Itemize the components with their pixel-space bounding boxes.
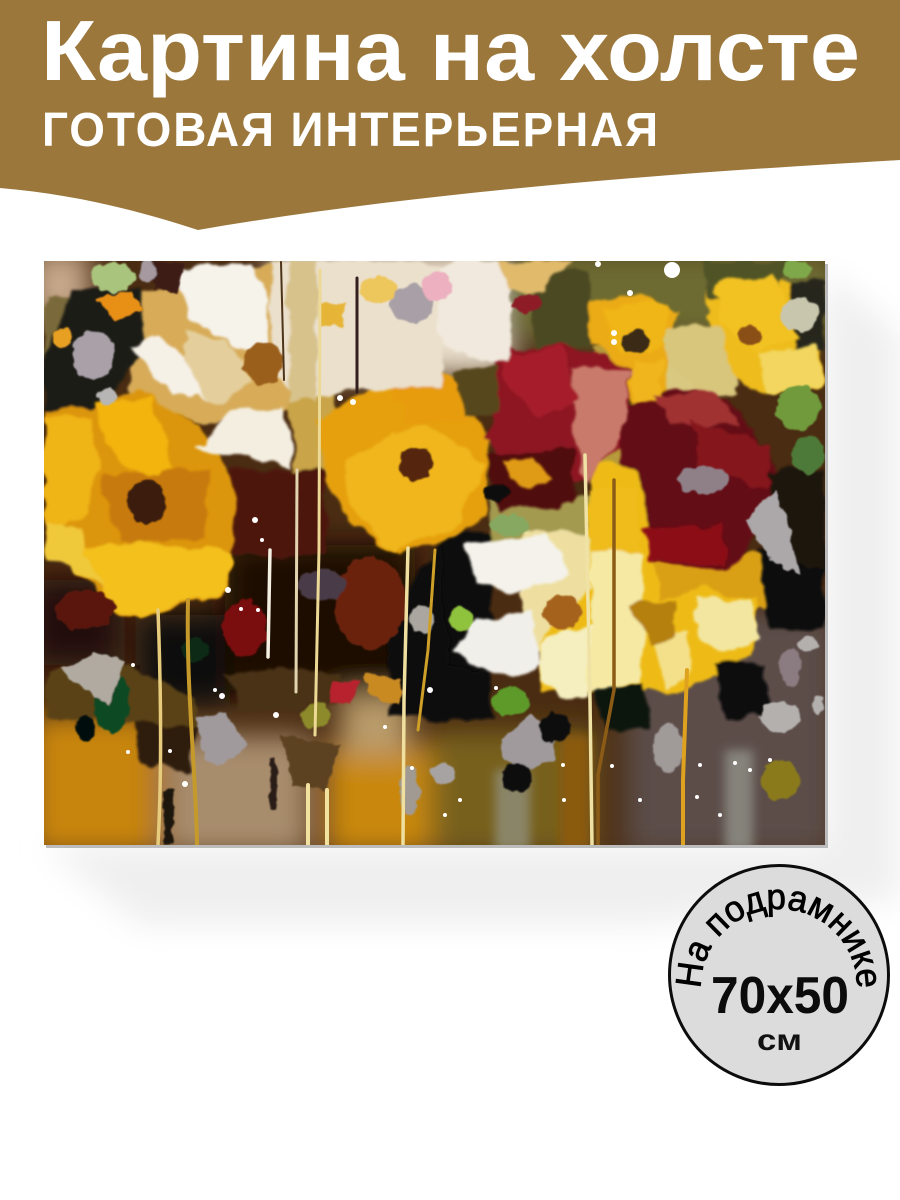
size badge bbox=[668, 864, 890, 1086]
subtitle: ГОТОВАЯ ИНТЕРЬЕРНАЯ bbox=[42, 104, 660, 157]
badge curved label: На подрамнике bbox=[675, 889, 876, 987]
painting: large colour masses bbox=[45, 262, 825, 770]
header banner bbox=[0, 0, 900, 230]
painting background bbox=[30, 250, 840, 855]
painting: backing colour areas bbox=[44, 262, 770, 670]
painting: petals and highlights bbox=[45, 262, 820, 697]
badge unit: см bbox=[757, 1024, 802, 1057]
badge size: 70x50 bbox=[711, 967, 849, 1025]
painting: drips bbox=[158, 262, 687, 845]
painting: abstract floral canvas bbox=[30, 250, 840, 855]
painting: soft bottom streaks bbox=[495, 735, 753, 850]
title: Картина на холсте bbox=[41, 4, 860, 99]
canvas shadow bbox=[44, 264, 900, 925]
painting: white speckles bbox=[126, 261, 772, 817]
painting: detail daubs bbox=[52, 261, 824, 845]
badge circle bbox=[670, 866, 888, 1084]
